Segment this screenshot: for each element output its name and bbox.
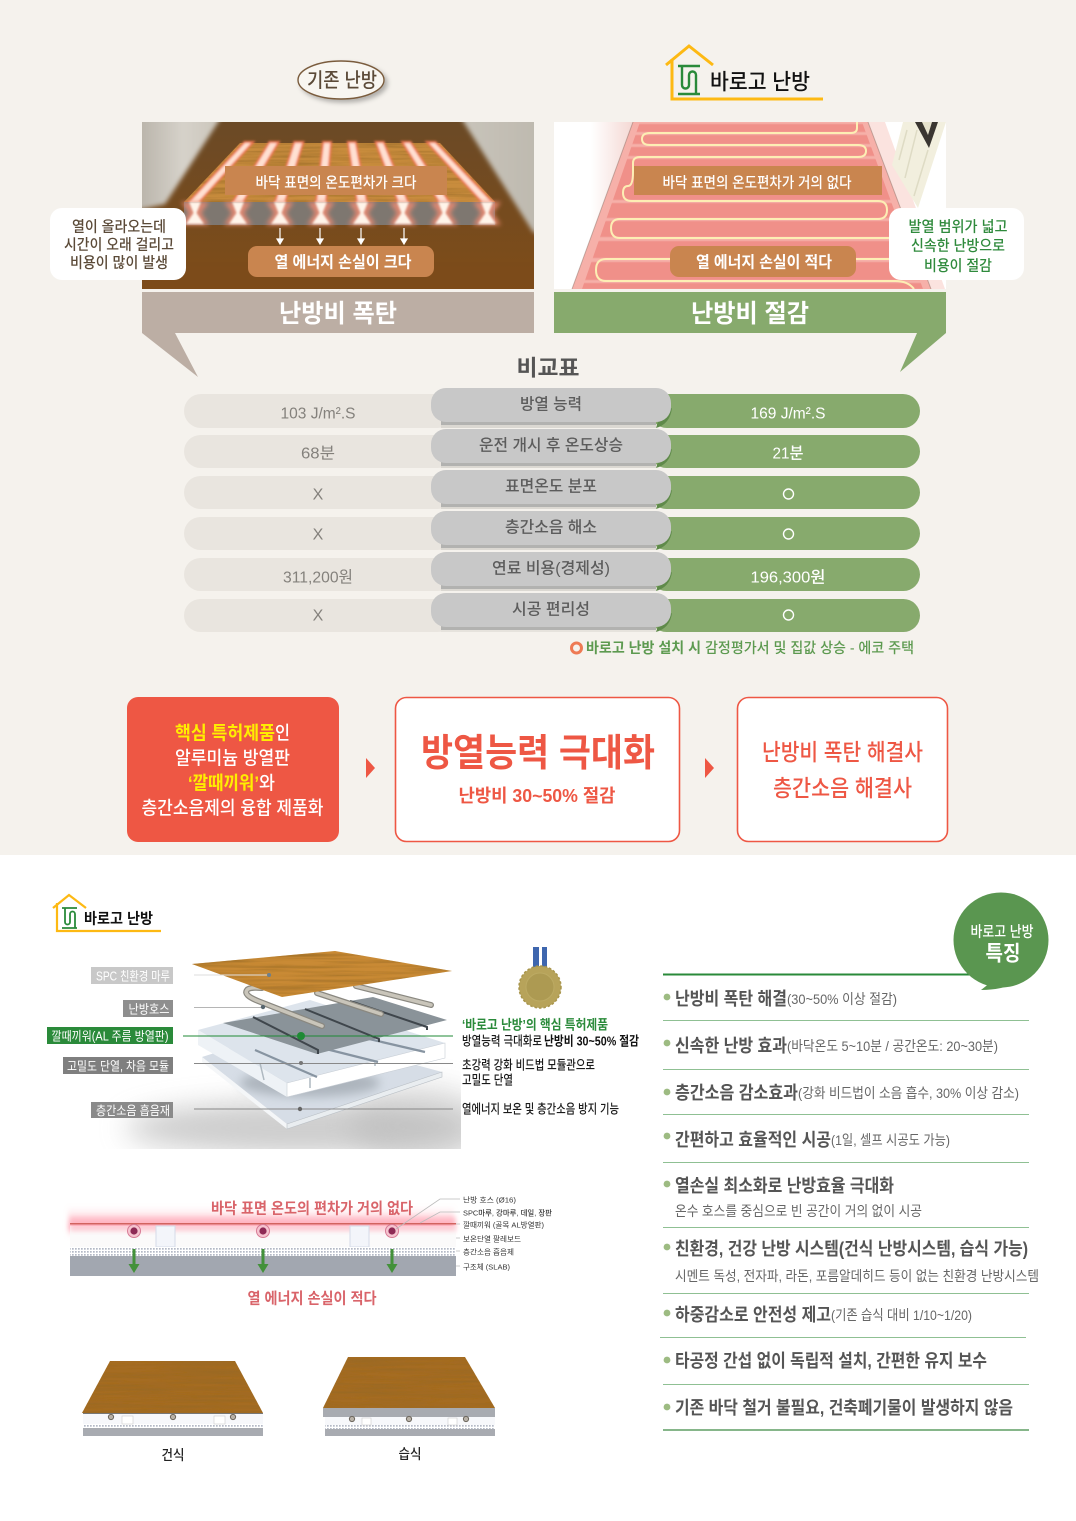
layer: insulation module <box>198 1000 445 1097</box>
panel: patented product: 와 <box>259 772 275 794</box>
text: patented core product <box>462 1018 639 1048</box>
layer: sound absorber <box>202 1030 442 1129</box>
row: heat output: 방열 능력 <box>520 396 582 414</box>
item: speed: 신속한 난방 효과 <box>675 1036 787 1056</box>
item: installation: (1일, 셀프 시공도 가능) <box>831 1132 950 1148</box>
heading: low heat loss: 열 에너지 손실이 적다 <box>248 1290 376 1308</box>
label: surface temperature difference small <box>634 166 882 195</box>
text: sound absorber note: 열에너지 보온 및 층간소음 방지 기능 <box>462 1102 619 1116</box>
logo: 바로고 난방 (large): 바로고 난방 <box>710 70 810 94</box>
label: AL plate: 깔때끼워(AL 주름 방열판) <box>52 1030 168 1044</box>
item: eco-friendly: 시멘트 독성, 전자파, 라돈, 포름알데히드 등이 없는 친환경 난방시스템 <box>675 1268 1039 1284</box>
row: floor noise: X <box>313 526 324 544</box>
row: fuel cost: 연료 비용(경제성) <box>492 560 610 578</box>
item: installation <box>664 1130 950 1150</box>
sound absorbing layer <box>70 1247 456 1256</box>
banner: 난방비 폭탄: 난방비 폭탄 <box>279 300 397 328</box>
label: insulation module: 고밀도 단열, 차음 모듈 <box>67 1060 169 1074</box>
row: fuel cost: 196,300원 <box>750 568 826 586</box>
callout: barogo benefit: 비용이 절감 <box>924 258 992 274</box>
panel: problems solved: 난방비 폭탄 해결사 <box>762 739 923 765</box>
structural slab <box>70 1256 456 1276</box>
item: speed <box>664 1036 998 1056</box>
row: heat output: 103 J/m².S <box>280 406 356 422</box>
legend: cross-section layers: 층간소음 흡음제 <box>463 1246 514 1256</box>
item: load: (기존 습식 대비 1/10~1/20) <box>831 1307 972 1323</box>
logo: 바로고 난방 (large) <box>666 46 823 99</box>
heading: 비교표: 비교표 <box>516 356 580 380</box>
legend: cross-section layers: 구조체 (SLAB) <box>463 1262 510 1272</box>
heat loss arrows <box>128 1249 398 1273</box>
layer: aluminium plate <box>223 997 447 1054</box>
note: appraisal value <box>572 640 914 657</box>
item: noise <box>664 1083 1019 1103</box>
text: insulation note: 초강력 강화 비드법 모듈관으로 <box>462 1058 595 1072</box>
panel: patented product: 핵심 특허제품 <box>175 722 275 744</box>
label: SPC floor: SPC 친환경 마루 <box>96 970 170 984</box>
arrows: heat going down <box>277 228 407 244</box>
legend: cross-section layers <box>396 1194 552 1272</box>
item: efficiency: 온수 호스를 중심으로 빈 공간이 거의 없이 시공 <box>675 1203 922 1219</box>
item: efficiency: 열손실 최소화로 난방효율 극대화 <box>675 1176 894 1196</box>
item: eco-friendly: 친환경, 건강 난방 시스템(건식 난방시스템, 습식 가능) <box>675 1239 1028 1259</box>
legend: cross-section layers: 깔때끼워 (골목 AL방열판) <box>463 1220 545 1230</box>
label: heating hose: 난방호스 <box>128 1002 170 1016</box>
label: heat loss small <box>670 246 856 277</box>
item: installation: 간편하고 효율적인 시공 <box>675 1130 831 1150</box>
row: floor noise: 층간소음 해소 <box>505 518 597 536</box>
label: heat loss small: 열 에너지 손실이 적다 <box>696 254 832 272</box>
text: insulation note: 고밀도 단열 <box>462 1072 513 1088</box>
text: insulation note <box>462 1058 595 1088</box>
item: speed: (바닥온도 5~10분 / 공간온도: 20~30분) <box>787 1038 998 1054</box>
insulation board <box>70 1226 456 1247</box>
row: surface temperature distribution <box>184 470 920 509</box>
layer: SPC wood floor <box>192 951 452 997</box>
logo: 바로고 난방 (small) <box>53 895 161 931</box>
badge: features speech bubble: 바로고 난방 <box>970 924 1034 940</box>
panel: maximized heat output <box>396 698 680 842</box>
panel: maximized heat output: 방열능력 극대화 <box>421 733 655 775</box>
row: fuel cost: 311,200원 <box>283 568 353 586</box>
illustration: wet system <box>323 1357 495 1462</box>
heading: 기존 난방 badge: 기존 난방 <box>307 69 377 92</box>
panel: patented product: 알루미늄 방열판 <box>175 748 290 768</box>
item: cost: 난방비 폭탄 해결 <box>675 989 787 1009</box>
row: warm-up time: 21분 <box>772 446 804 462</box>
layer labels <box>47 967 173 1118</box>
callout: conventional drawback: 시간이 오래 걸리고 <box>64 236 174 254</box>
item: load <box>664 1305 972 1325</box>
row: ease of installation <box>184 593 920 632</box>
row: warm-up time: 운전 개시 후 온도상승 <box>479 436 623 454</box>
legend: cross-section layers: 난방 호스 (Ø16) <box>463 1194 517 1204</box>
label: heat loss large <box>248 246 434 277</box>
callout: barogo benefit: 발열 범위가 넓고 <box>908 218 1008 236</box>
item: no demolition: 기존 바닥 철거 불필요, 건축폐기물이 발생하지 않음 <box>675 1398 1013 1418</box>
panel: conventional heating photo <box>142 122 534 289</box>
note: appraisal value: 감정평가서 및 집값 상승 - 에코 주택 <box>705 640 914 657</box>
door <box>892 122 946 208</box>
diagram: exploded floor layers <box>121 951 461 1149</box>
insulation ribs <box>156 1226 369 1247</box>
heading: no temperature deviation: 바닥 표면 온도의 편차가 거의 없다 <box>211 1200 413 1218</box>
layer: heating hose <box>246 986 431 1026</box>
floor mat with heated stripes <box>184 143 495 202</box>
panel: problems solved: 층간소음 해결사 <box>773 775 912 801</box>
hoses <box>128 1224 398 1238</box>
label: sound absorber: 층간소음 흡음재 <box>96 1104 170 1118</box>
note: appraisal value: 바로고 난방 설치 시 <box>586 640 701 657</box>
panel: problems solved <box>738 698 948 842</box>
callout: barogo benefit <box>889 208 1024 280</box>
item: efficiency <box>664 1176 922 1219</box>
diagram: floor cross-section <box>68 1206 456 1276</box>
panel: patented product <box>127 697 339 842</box>
leader lines <box>183 973 453 1111</box>
row: warm-up time <box>184 429 920 468</box>
label: heat loss large: 열 에너지 손실이 크다 <box>274 254 412 272</box>
heating hose <box>596 122 914 289</box>
callout: conventional drawback: 열이 올라오는데 <box>72 218 166 236</box>
illustration: dry system: 건식 <box>162 1447 184 1463</box>
illustration: wet system: 습식 <box>398 1446 422 1462</box>
feature list <box>660 974 1039 1430</box>
label: surface temperature difference large: 바닥 표면의 온도편차가 크다 <box>256 174 417 192</box>
row: ease of installation: X <box>313 608 324 624</box>
panel: maximized heat output: 난방비 30~50% 절감 <box>458 786 616 806</box>
illustration: dry system <box>82 1361 263 1463</box>
label: SPC floor <box>91 967 173 984</box>
floor cross-section with heat points <box>181 202 501 225</box>
callout: conventional drawback <box>50 208 186 280</box>
panel: barogo heating photo <box>554 122 946 289</box>
callout: conventional drawback: 비용이 많이 발생 <box>70 254 168 272</box>
arrow: to box three <box>705 758 714 778</box>
item: load: 하중감소로 안전성 제고 <box>675 1305 831 1325</box>
panel: patented product: 인 <box>275 722 290 744</box>
text: patented core product: ‘바로고 난방’의 핵심 특허제품 <box>462 1018 608 1032</box>
row: surface temperature distribution: 표면온도 분포 <box>505 478 597 496</box>
item: noise: (강화 비드법이 소음 흡수, 30% 이상 감소) <box>798 1085 1019 1101</box>
banner: 난방비 절감: 난방비 절감 <box>691 300 809 328</box>
panel: patented product: ‘깔때끼워’ <box>188 772 259 794</box>
background: top section <box>0 0 1076 855</box>
row: ease of installation: 시공 편리성 <box>512 600 590 618</box>
banner: 난방비 폭탄 <box>142 292 534 377</box>
legend: cross-section layers: 보온단열 팔레보드 <box>463 1234 521 1244</box>
panel: patented product: 층간소음제의 융합 제품화 <box>142 798 324 818</box>
row: floor noise <box>184 511 920 550</box>
comparison table <box>184 388 920 632</box>
label: surface temperature difference small: 바닥 표면의 온도편차가 거의 없다 <box>662 174 852 192</box>
callout: barogo benefit: 신속한 난방으로 <box>911 238 1005 254</box>
arrow: to box two <box>366 758 375 778</box>
legend: cross-section layers: SPC마루, 강마루, 데일, 장판 <box>463 1208 552 1218</box>
badge: features speech bubble <box>954 892 1048 990</box>
item: eco-friendly <box>664 1239 1039 1284</box>
row: surface temperature distribution: X <box>313 486 324 504</box>
row: heat output <box>184 388 920 428</box>
text: patented core product: 방열능력 극대화로 <box>462 1034 542 1048</box>
text: patented core product: 난방비 30~50% 절감 <box>544 1034 639 1048</box>
item: independent install: 타공정 간섭 없이 독립적 설치, 간편한 유지 보수 <box>675 1351 987 1371</box>
badge: features speech bubble: 특징 <box>986 942 1020 966</box>
banner: 난방비 절감 <box>554 292 946 372</box>
item: noise: 층간소음 감소효과 <box>675 1083 798 1103</box>
heading: 기존 난방 badge <box>298 61 384 99</box>
label: surface temperature difference large <box>225 166 447 195</box>
logo: 바로고 난방 (small): 바로고 난방 <box>84 910 153 928</box>
item: cost: (30~50% 이상 절감) <box>787 991 897 1007</box>
icon: gold medal <box>519 947 561 1008</box>
row: fuel cost <box>184 552 920 591</box>
row: heat output: 169 J/m².S <box>750 406 826 422</box>
item: cost <box>664 989 897 1009</box>
row: warm-up time: 68분 <box>301 446 335 462</box>
